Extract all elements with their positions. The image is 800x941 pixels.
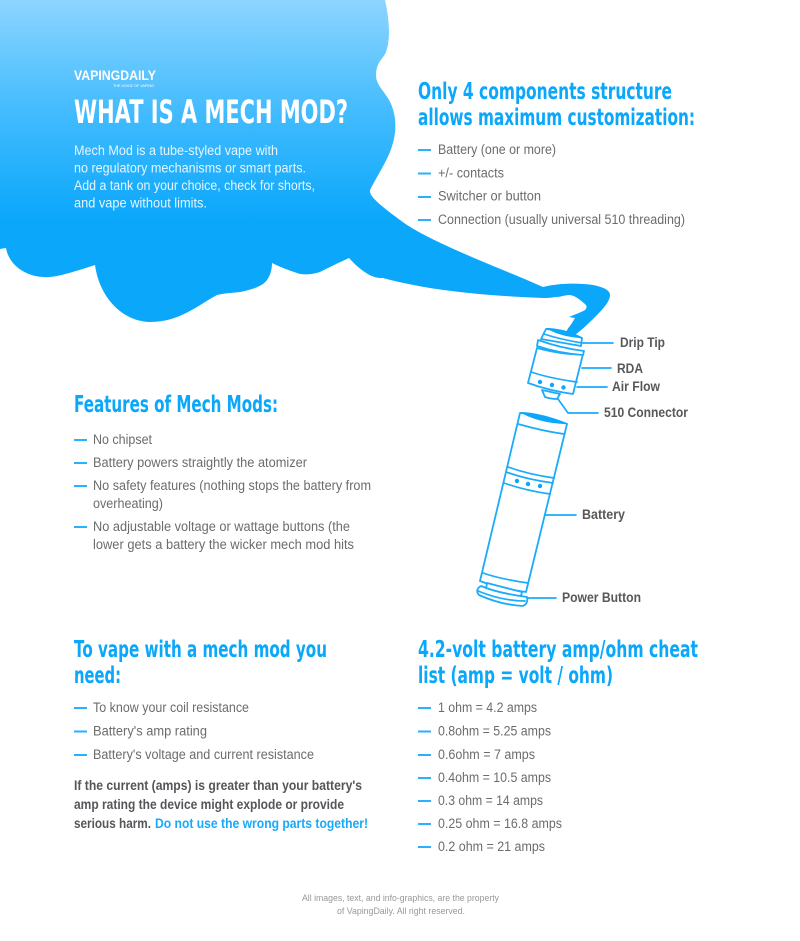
callouts: 510 Connector [604, 405, 689, 420]
intro text: Mech Mod is a tube-styled vape with [74, 143, 278, 158]
list: features: No chipset [93, 432, 152, 447]
battery dots [515, 479, 542, 488]
drip tip [541, 328, 583, 346]
list: features: lower gets a battery the wicker mech mod hits [93, 537, 354, 552]
callouts: Power Button [562, 590, 641, 605]
RDA body [528, 340, 584, 394]
list: components: Battery (one or more) [438, 142, 556, 157]
diagram: atomizer [528, 328, 584, 399]
list: amp values: 0.6ohm = 7 amps [438, 747, 535, 762]
510 connector [542, 390, 560, 399]
diagram: battery [477, 412, 568, 606]
logo: VapingDaily [74, 67, 157, 88]
list: amp values: 1 ohm = 4.2 amps [438, 700, 537, 715]
heading: what you need [74, 635, 327, 689]
heading: what you need: To vape with a mech mod you [74, 635, 327, 663]
list: components: +/- contacts [438, 166, 504, 180]
footer: of VapingDaily. All right reserved. [337, 906, 465, 916]
battery rings [483, 424, 564, 583]
callouts: Air Flow [612, 379, 660, 394]
list: amp values: 0.3 ohm = 14 amps [438, 793, 543, 808]
callouts: Drip Tip [620, 335, 665, 350]
warning text: amp rating the device might explode or provide [74, 797, 344, 812]
list: what you need: Battery's voltage and current resistance [93, 747, 314, 762]
panel: what you need [74, 635, 368, 831]
list: components [418, 142, 685, 227]
logo: VapingDaily: VAPINGDAILY [74, 67, 157, 83]
intro text: Add a tank on your choice, check for shorts, [74, 178, 315, 193]
battery tube [480, 413, 567, 592]
list: amp values: 0.2 ohm = 21 amps [438, 839, 545, 854]
title: WHAT IS A MECH MOD? [74, 93, 348, 131]
callouts: Battery [582, 507, 625, 522]
heading: components: Only 4 components structure [418, 77, 672, 105]
list: amp values: 0.4ohm = 10.5 amps [438, 770, 551, 785]
list: features: Battery powers straightly the atomizer [93, 455, 307, 470]
heading: cheat list: list (amp = volt / ohm) [418, 661, 613, 689]
callouts: RDA [617, 361, 643, 376]
warning text: Do not use the wrong parts together! [155, 816, 368, 831]
list: features: No adjustable voltage or wattage buttons (the [93, 519, 350, 534]
power button [477, 583, 527, 606]
list: features: No safety features (nothing stops the battery from [93, 478, 371, 493]
list: what you need [74, 700, 314, 762]
list: what you need: To know your coil resistance [93, 700, 249, 715]
footer: All images, text, and info-graphics, are the property [302, 893, 499, 903]
list: components: Switcher or button [438, 188, 541, 204]
logo: VapingDaily: THE VOICE OF VAPING [113, 83, 154, 88]
vapor cloud [0, 0, 610, 335]
heading: features: Features of Mech Mods: [74, 390, 278, 418]
panel: components [418, 77, 695, 227]
warning text: serious harm. [74, 816, 151, 831]
list: features [74, 432, 371, 552]
list: amp values: 0.8ohm = 5.25 amps [438, 724, 551, 738]
list: amp values [418, 700, 562, 854]
heading: what you need: need: [74, 661, 121, 689]
panel: cheat list [418, 635, 698, 854]
footer [302, 893, 499, 916]
intro text: no regulatory mechanisms or smart parts. [74, 160, 306, 176]
list: amp values: 0.25 ohm = 16.8 amps [438, 816, 562, 831]
battery top [520, 412, 568, 424]
heading: cheat list [418, 635, 698, 689]
list: what you need: Battery's amp rating [93, 724, 207, 738]
callouts [527, 335, 689, 605]
panel: features [74, 390, 371, 552]
list: features: overheating) [93, 496, 163, 511]
warning text [74, 778, 368, 831]
intro text: and vape without limits. [74, 196, 207, 210]
intro text [74, 143, 315, 210]
list: components: Connection (usually universal 510 threading) [438, 212, 685, 227]
warning text: If the current (amps) is greater than your battery's [74, 778, 362, 793]
